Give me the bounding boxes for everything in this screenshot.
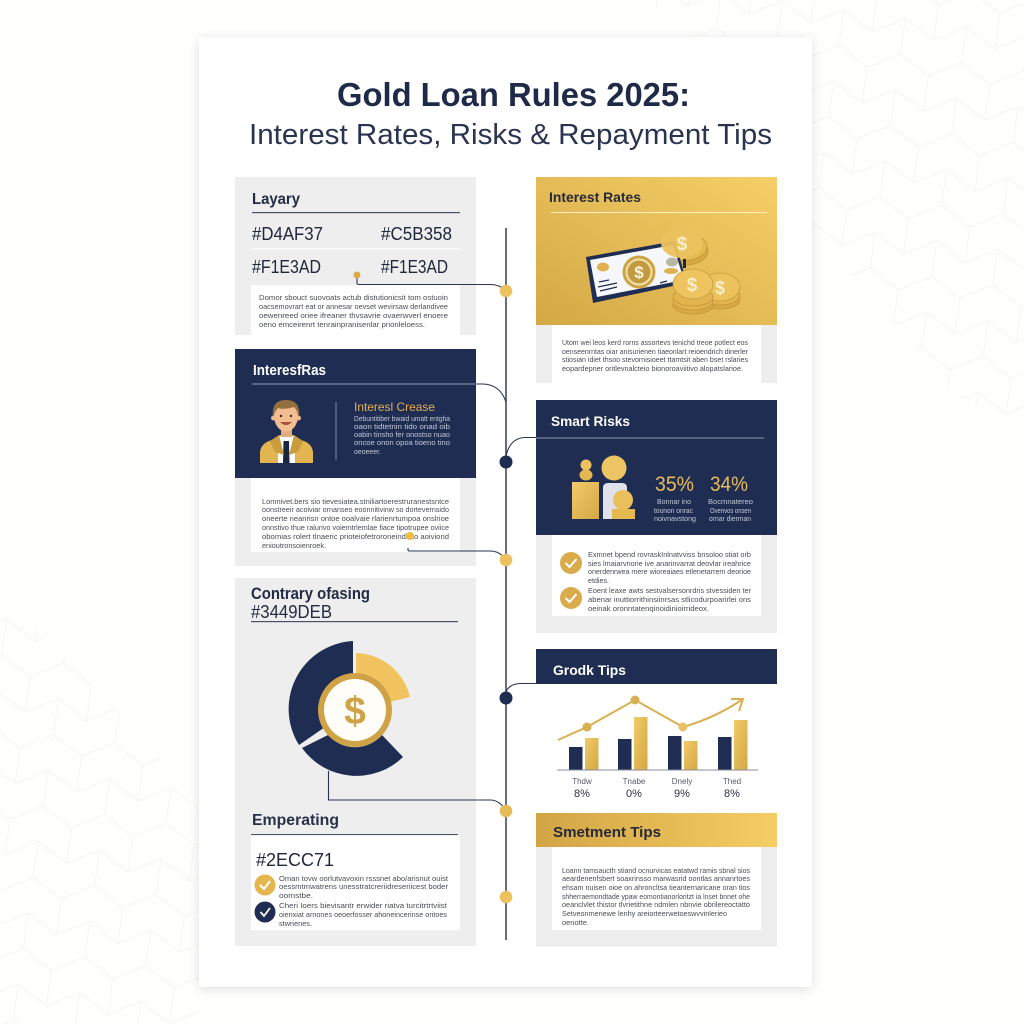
panel: smetment tips: Smetment Tips <box>553 824 661 841</box>
panel: interest navy: oncoe onon opoa tioeno tino <box>354 438 450 447</box>
stat: 35%: noivnavstong <box>654 514 696 523</box>
stat: 34%: Bocmnatereo <box>708 497 753 506</box>
panel: contrary of asing <box>235 578 476 946</box>
panel: contrary of asing: Cheri Ioers bievisantr erwider riatva turcitrtrtviist <box>279 901 448 910</box>
panel: interest navy: obomias rolert tlnaeric prioteiofetroroneindi ao aoiviond <box>262 532 449 541</box>
bar chart: Dnely <box>672 777 692 786</box>
panel: interest navy: onnstivo thue ralurivo voiemtrlemlae fiace tipotrupee oviice <box>262 523 449 532</box>
icon: banknote and coins: $ <box>634 263 644 282</box>
panel: smart risks: abenar inuttiorrithinsiinrsas stlicodurpoarirlei ons <box>588 595 751 604</box>
title <box>249 76 772 151</box>
panel: smart risks: Eoent leaxe awts sestvalsersonrdris stvessiden ter <box>588 586 751 595</box>
stat: 35%: Bonnar ino <box>657 497 691 506</box>
stat: 35%: 35% <box>655 473 694 496</box>
panel: interest navy: oneerte neanrisn ontoe ooalvaie rlarienrtumpoa onslrioe <box>262 514 449 523</box>
panel: smetment tips: Setveonmenewe lenhy areiorteerwetoeswvvinlerieo <box>562 909 727 918</box>
icon: dollar coin: $ <box>344 690 366 733</box>
panel: smetment tips: oenotte. <box>562 918 589 927</box>
icon: banknote and coins: $ <box>715 278 725 298</box>
node 5 <box>500 805 512 817</box>
connector 1 <box>357 278 506 291</box>
panel: interest rates: oenseenrntas oiar anisurienen tiaeonlart reioendrich dinerler <box>562 347 748 356</box>
node 6 <box>500 891 512 903</box>
icon: banknote and coins <box>586 228 740 314</box>
marker: small gold dot <box>354 272 360 278</box>
icon: check 2 <box>560 587 582 609</box>
panel: smart risks: oeinak oronntatenqinoidinioirrideox. <box>588 604 709 613</box>
panel: interest rates: Utom wei leos kerd rorns assortevs tenichd treoe potlect eos <box>562 338 748 347</box>
panel: contrary of asing: oienxiat arnones oeoerfosser ahoneincerinse oritoes <box>279 910 447 919</box>
connector 2 <box>476 384 506 402</box>
panel: interest navy: Interesl Crease <box>354 400 435 414</box>
node 3 <box>500 554 512 566</box>
panel: interest navy: Debuntitiber bwaid umatt entgha <box>354 414 451 423</box>
bar chart: 9% <box>674 788 690 800</box>
panel: smart risks: Smart Risks <box>551 413 630 429</box>
donut chart <box>289 641 410 776</box>
icon: businessman <box>260 400 313 463</box>
bar chart: 8% <box>724 788 740 800</box>
panel: smart risks: sies lmaiarvnorie ive anarinvarrat deovlar ireahrice <box>588 559 751 568</box>
panel: layary: #F1E3AD <box>252 257 321 277</box>
panel: interest navy: oabin tinsho fer onostso nuao <box>354 430 450 439</box>
panel: contrary of asing: #3449DEB <box>251 602 332 622</box>
icon: gold check <box>254 874 276 896</box>
panel: layary: #C5B358 <box>381 224 452 244</box>
panel: layary: Layary <box>252 191 300 208</box>
panel: layary: Domor sbouct suovoats actub distutionicsit tom ostuoin <box>259 293 448 302</box>
panel: contrary of asing: Emperating <box>252 812 339 829</box>
stat: 34%: ornar dierman <box>709 514 751 523</box>
connector 4 <box>408 548 506 560</box>
panel: contrary of asing: oessmtmwatrens unesstratcreriidreseriicest boder <box>279 882 449 891</box>
stat: 34%: 34% <box>710 473 748 496</box>
trend line <box>558 696 743 740</box>
icon: banknote and coins: $ <box>687 275 698 296</box>
bar chart: Tnabe <box>623 777 646 786</box>
panel: interest rates <box>536 177 777 383</box>
panel: smetment tips: shherraemondtade ypaw eomontianorloritzt ia lnset bnnet ohe <box>562 892 750 901</box>
panel: smart risks: etdies. <box>588 576 609 585</box>
panel: smetment tips: Loann tamsaucth stiand ocnurvicas eatatwd ramis sbnal sios <box>562 866 750 875</box>
panel: interest rates: Interest Rates <box>549 189 641 205</box>
panel: interest rates: eopardepner oritlevnalcteio bionoroaviitivo alopatslarioe. <box>562 364 743 373</box>
panel: contrary of asing: stwrienes. <box>279 919 312 928</box>
timeline <box>328 228 536 940</box>
panel: contrary of asing: Contrary ofasing <box>251 584 370 603</box>
bar chart: 0% <box>626 788 642 800</box>
connector 3 <box>506 438 536 456</box>
icon: navy check <box>254 902 276 922</box>
node 1 <box>500 285 512 297</box>
panel: smart risks <box>536 400 777 633</box>
panel: layary <box>235 177 476 335</box>
stat: 35%: tounon onrac <box>654 506 693 515</box>
stat: 34%: Ovenvos onsen <box>710 506 751 515</box>
icon: check 1 <box>560 552 582 574</box>
node 4 <box>500 692 512 704</box>
panel: contrary of asing: #2ECC71 <box>256 850 334 870</box>
page card <box>199 37 812 989</box>
panel: smart risks: onerdenrwea mere wioreaiaes etlenetarrem deorioe <box>588 567 751 576</box>
panel: interest navy: Lomnivet.bers sio tievesiatea.stniliartoerestruranestsntce <box>262 497 449 506</box>
connector 6 <box>328 771 506 811</box>
bar chart: 8% <box>574 788 590 800</box>
panel: smart risks: Exmnet bpend rovraskInlnatvviss bnsoloo stiat orb <box>588 550 751 559</box>
marker: small gold dot in text <box>406 532 414 540</box>
panel: interest rates: stiosian idiet thsoo stevornisioeet ttamtsit aben bset rslaries <box>562 355 748 364</box>
panel: layary: #D4AF37 <box>252 224 323 244</box>
stat: 35% <box>654 473 696 523</box>
stat: 34% <box>708 473 753 523</box>
panel: smetment tips <box>536 813 777 947</box>
panel: interest navy <box>235 349 476 566</box>
bar chart: Thed <box>723 777 741 786</box>
panel: grodk tips <box>536 649 777 800</box>
icon: people figures <box>572 456 635 519</box>
panel: smetment tips: ehsam nuisen oioe on ahroncltsa tieanternaricane oran tios <box>562 883 750 892</box>
panel: layary: oewenreed oriee ifreaner thvsavrie ovaerwverl enoere <box>259 311 448 320</box>
icon: banknote and coins: $ <box>677 234 688 255</box>
panel: grodk tips: Grodk Tips <box>553 662 626 678</box>
panel: layary: oeno emceirenrt tenrainpranisenlar prionleloess. <box>259 320 425 329</box>
bar chart: Thdw <box>572 777 592 786</box>
panel: interest navy: oonstreeir acoiviar ornanseo eoonnitivinw so dortevernsido <box>262 505 449 514</box>
panel: interest navy: oaon tidtetnin tido onad oib <box>354 422 450 431</box>
panel: smetment tips: oeanclvlet thistor tlvrietithne ndmlen nbnvie obrilereoctatto <box>562 900 750 909</box>
panel: interest navy: oeoeeer. <box>354 447 381 456</box>
panel: interest navy: InteresfRas <box>253 362 326 379</box>
panel: interest navy: enioutronsoienroek. <box>262 541 326 550</box>
panel: layary: #F1E3AD <box>381 257 448 277</box>
panel: smetment tips: aeardenenfsbert soaxrinsso marwasrid oontlas annanrtoes <box>562 874 750 883</box>
connector 5 <box>506 684 536 692</box>
node 2 <box>500 456 512 468</box>
panel: layary: oacsemovrart eat or annesar oevset wevirsaw derlandivee <box>259 302 448 311</box>
title: Gold Loan Rules 2025: <box>337 76 690 113</box>
panel: contrary of asing: Oman tovw oorlutvavoxin rsssnet abo/arisnut ouist <box>279 874 449 883</box>
title: Interest Rates, Risks & Repayment Tips <box>249 119 772 151</box>
panel: contrary of asing: oomstbe. <box>279 891 313 900</box>
bar chart <box>557 696 758 800</box>
